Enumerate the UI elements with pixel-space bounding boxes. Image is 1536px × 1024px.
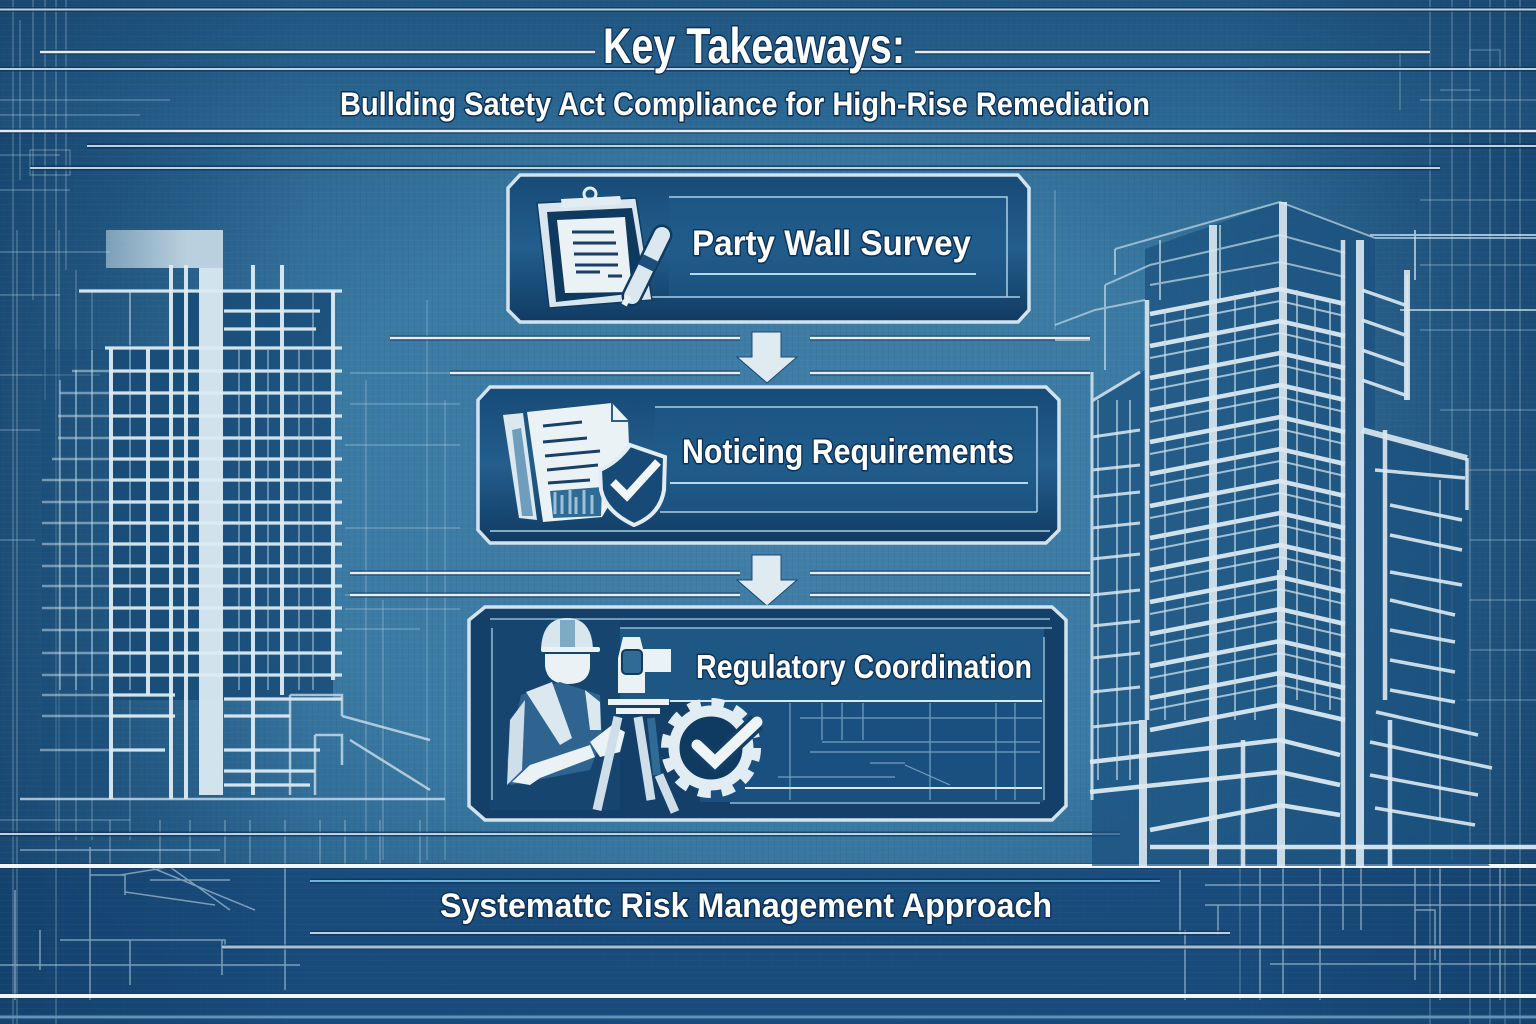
left building: floor lines: [79, 291, 342, 785]
subtitle: Bullding Satety Act Compliance for High-Rise Remediation: [340, 86, 1150, 122]
icon: clipboard and pen: [537, 188, 662, 308]
title: Key Takeaways:: [603, 18, 905, 74]
card inner lines: [490, 619, 1052, 810]
step 1 label: Party Wall Survey: [692, 224, 972, 263]
chart: background blueprint sketch: [778, 703, 1042, 800]
left building: core column: [106, 230, 223, 795]
card inner lines: [650, 197, 1020, 297]
right building blueprint: [1055, 202, 1536, 866]
card inner lines: [490, 407, 1050, 531]
right building: roof lines: [1055, 202, 1536, 400]
right building: floor slabs: [1090, 289, 1536, 847]
arrow: step 1 to step 2: [737, 332, 797, 383]
right building: right wing: [1362, 290, 1492, 825]
right building: left wing: [1092, 372, 1140, 800]
left building: podium: [20, 695, 445, 799]
panel: Party Wall Survey: [508, 175, 1029, 322]
step 3 label: Regulatory Coordination: [696, 648, 1032, 685]
right building: vertical piers: [1143, 202, 1360, 866]
card frame: [478, 387, 1059, 543]
footer banner text: Systemattc Risk Management Approach: [440, 887, 1052, 925]
panel: Regulatory Coordination: [469, 607, 1066, 820]
left building: tower shade: [111, 291, 333, 700]
right building: tower shade: [1092, 202, 1490, 866]
icon: surveyor with total station: [507, 618, 675, 812]
arrow: step 2 to step 3: [737, 555, 797, 606]
card frame: [508, 175, 1029, 322]
card frame: [469, 607, 1066, 820]
icon: document and shield: [503, 403, 665, 525]
panel: Noticing Requirements: [478, 387, 1059, 543]
left building blueprint: [20, 230, 445, 799]
step 2 label: Noticing Requirements: [682, 433, 1014, 471]
icon: gear with check: [665, 702, 757, 794]
left building: vertical structure: [111, 265, 333, 799]
